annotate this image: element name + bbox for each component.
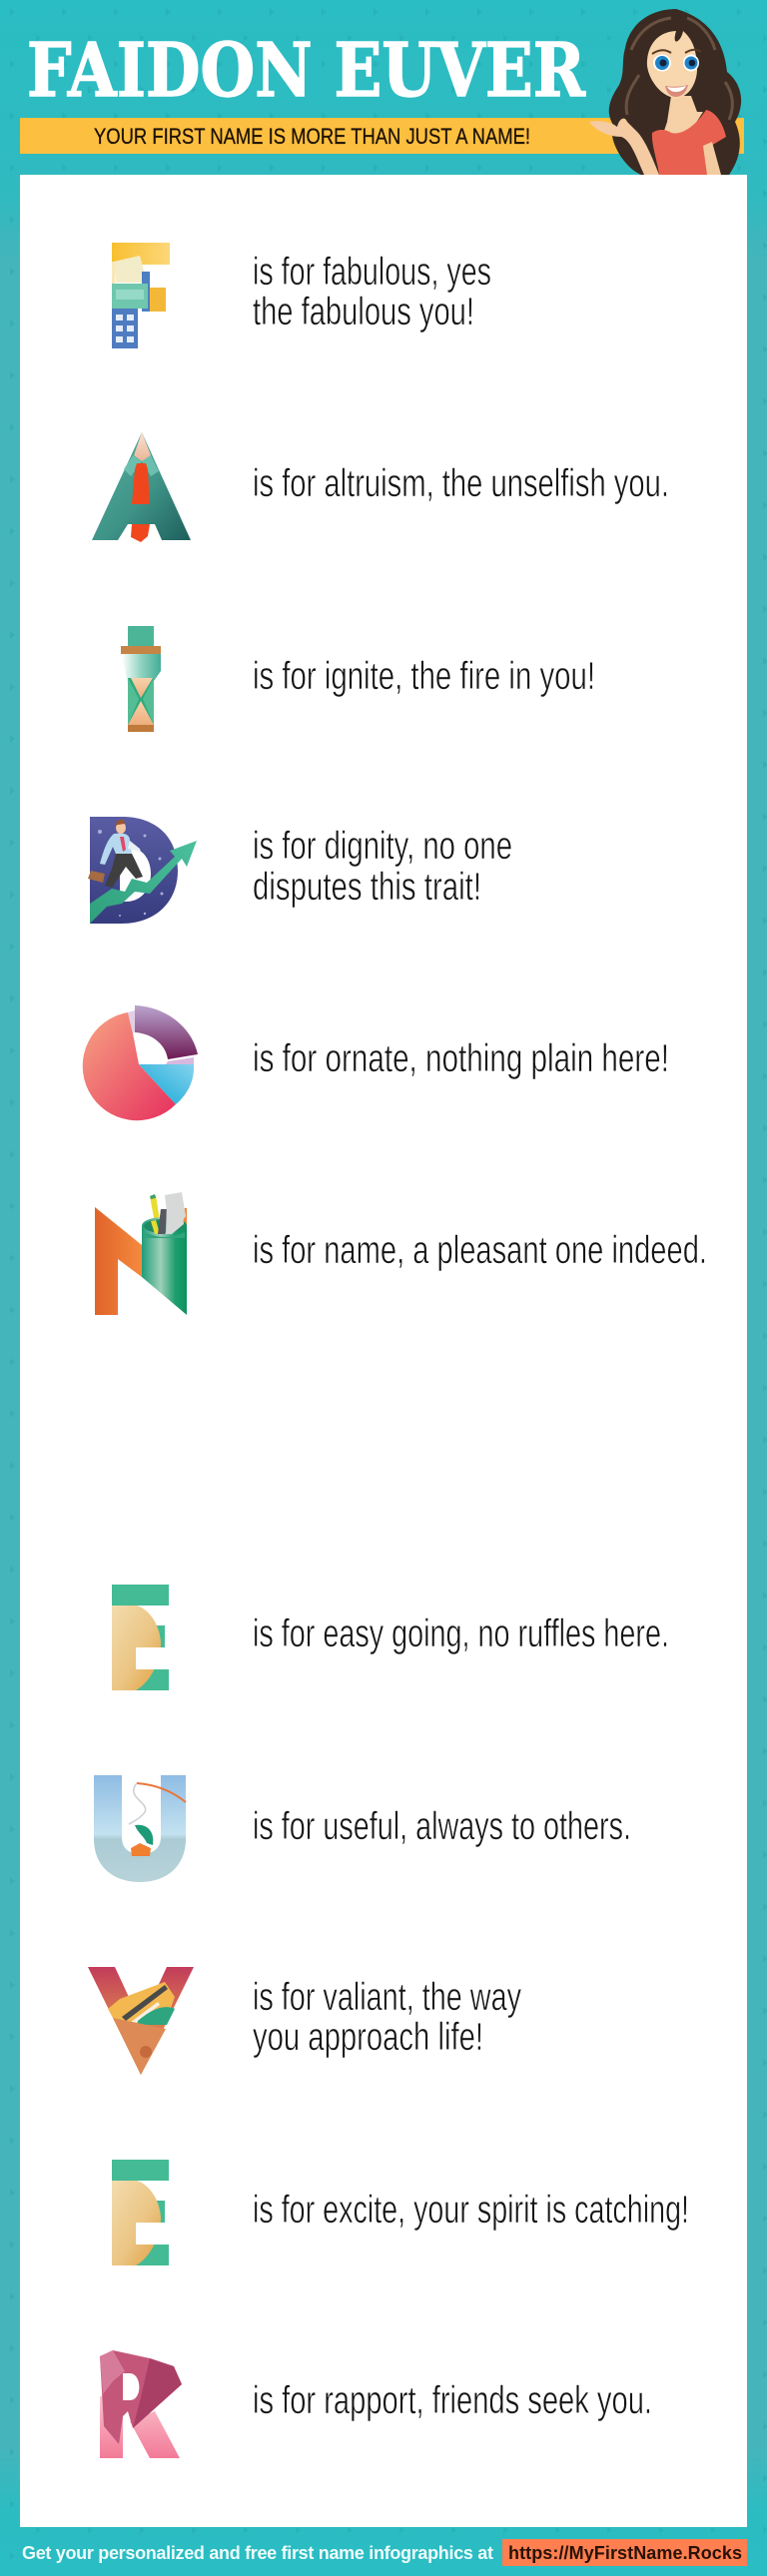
footer link badge: https://MyFirstName.Rocks	[508, 2543, 742, 2563]
text line: is for fabulous, yes	[253, 251, 491, 294]
footer text: Get your personalized and free first name infographics at	[22, 2543, 493, 2563]
title: FAIDON EUVER	[27, 28, 585, 114]
icon: letter N with pencil cup	[95, 1192, 187, 1315]
icon: letter R with ruby	[100, 2350, 182, 2458]
icon: letter F with office items	[112, 243, 170, 348]
icon: letter D with climbing businessman	[88, 817, 197, 924]
text line: is for useful, always to others.	[253, 1805, 631, 1848]
icon: letter I with hourglass	[121, 626, 161, 732]
icon: letter O as pie chart	[83, 1005, 198, 1120]
icon: letter E with moon	[112, 2160, 170, 2265]
text line: is for dignity, no one	[253, 825, 512, 868]
text line: disputes this trait!	[253, 866, 481, 909]
icon: letter U with fishing scene	[94, 1775, 186, 1882]
icon: letter V with wallet	[88, 1967, 194, 2075]
subtitle banner	[20, 118, 744, 154]
icon: letter E with moon	[112, 1585, 170, 1690]
text line: the fabulous you!	[253, 291, 474, 333]
icon: letter A with pencil tip and tie	[92, 432, 191, 542]
text line: you approach life!	[253, 2016, 483, 2059]
text line: is for valiant, the way	[253, 1976, 521, 2019]
illustration: cartoon woman presenting	[589, 9, 741, 175]
row F	[112, 243, 491, 348]
text line: is for ignite, the fire in you!	[253, 655, 595, 698]
subtitle banner: YOUR FIRST NAME IS MORE THAN JUST A NAME!	[94, 124, 530, 149]
